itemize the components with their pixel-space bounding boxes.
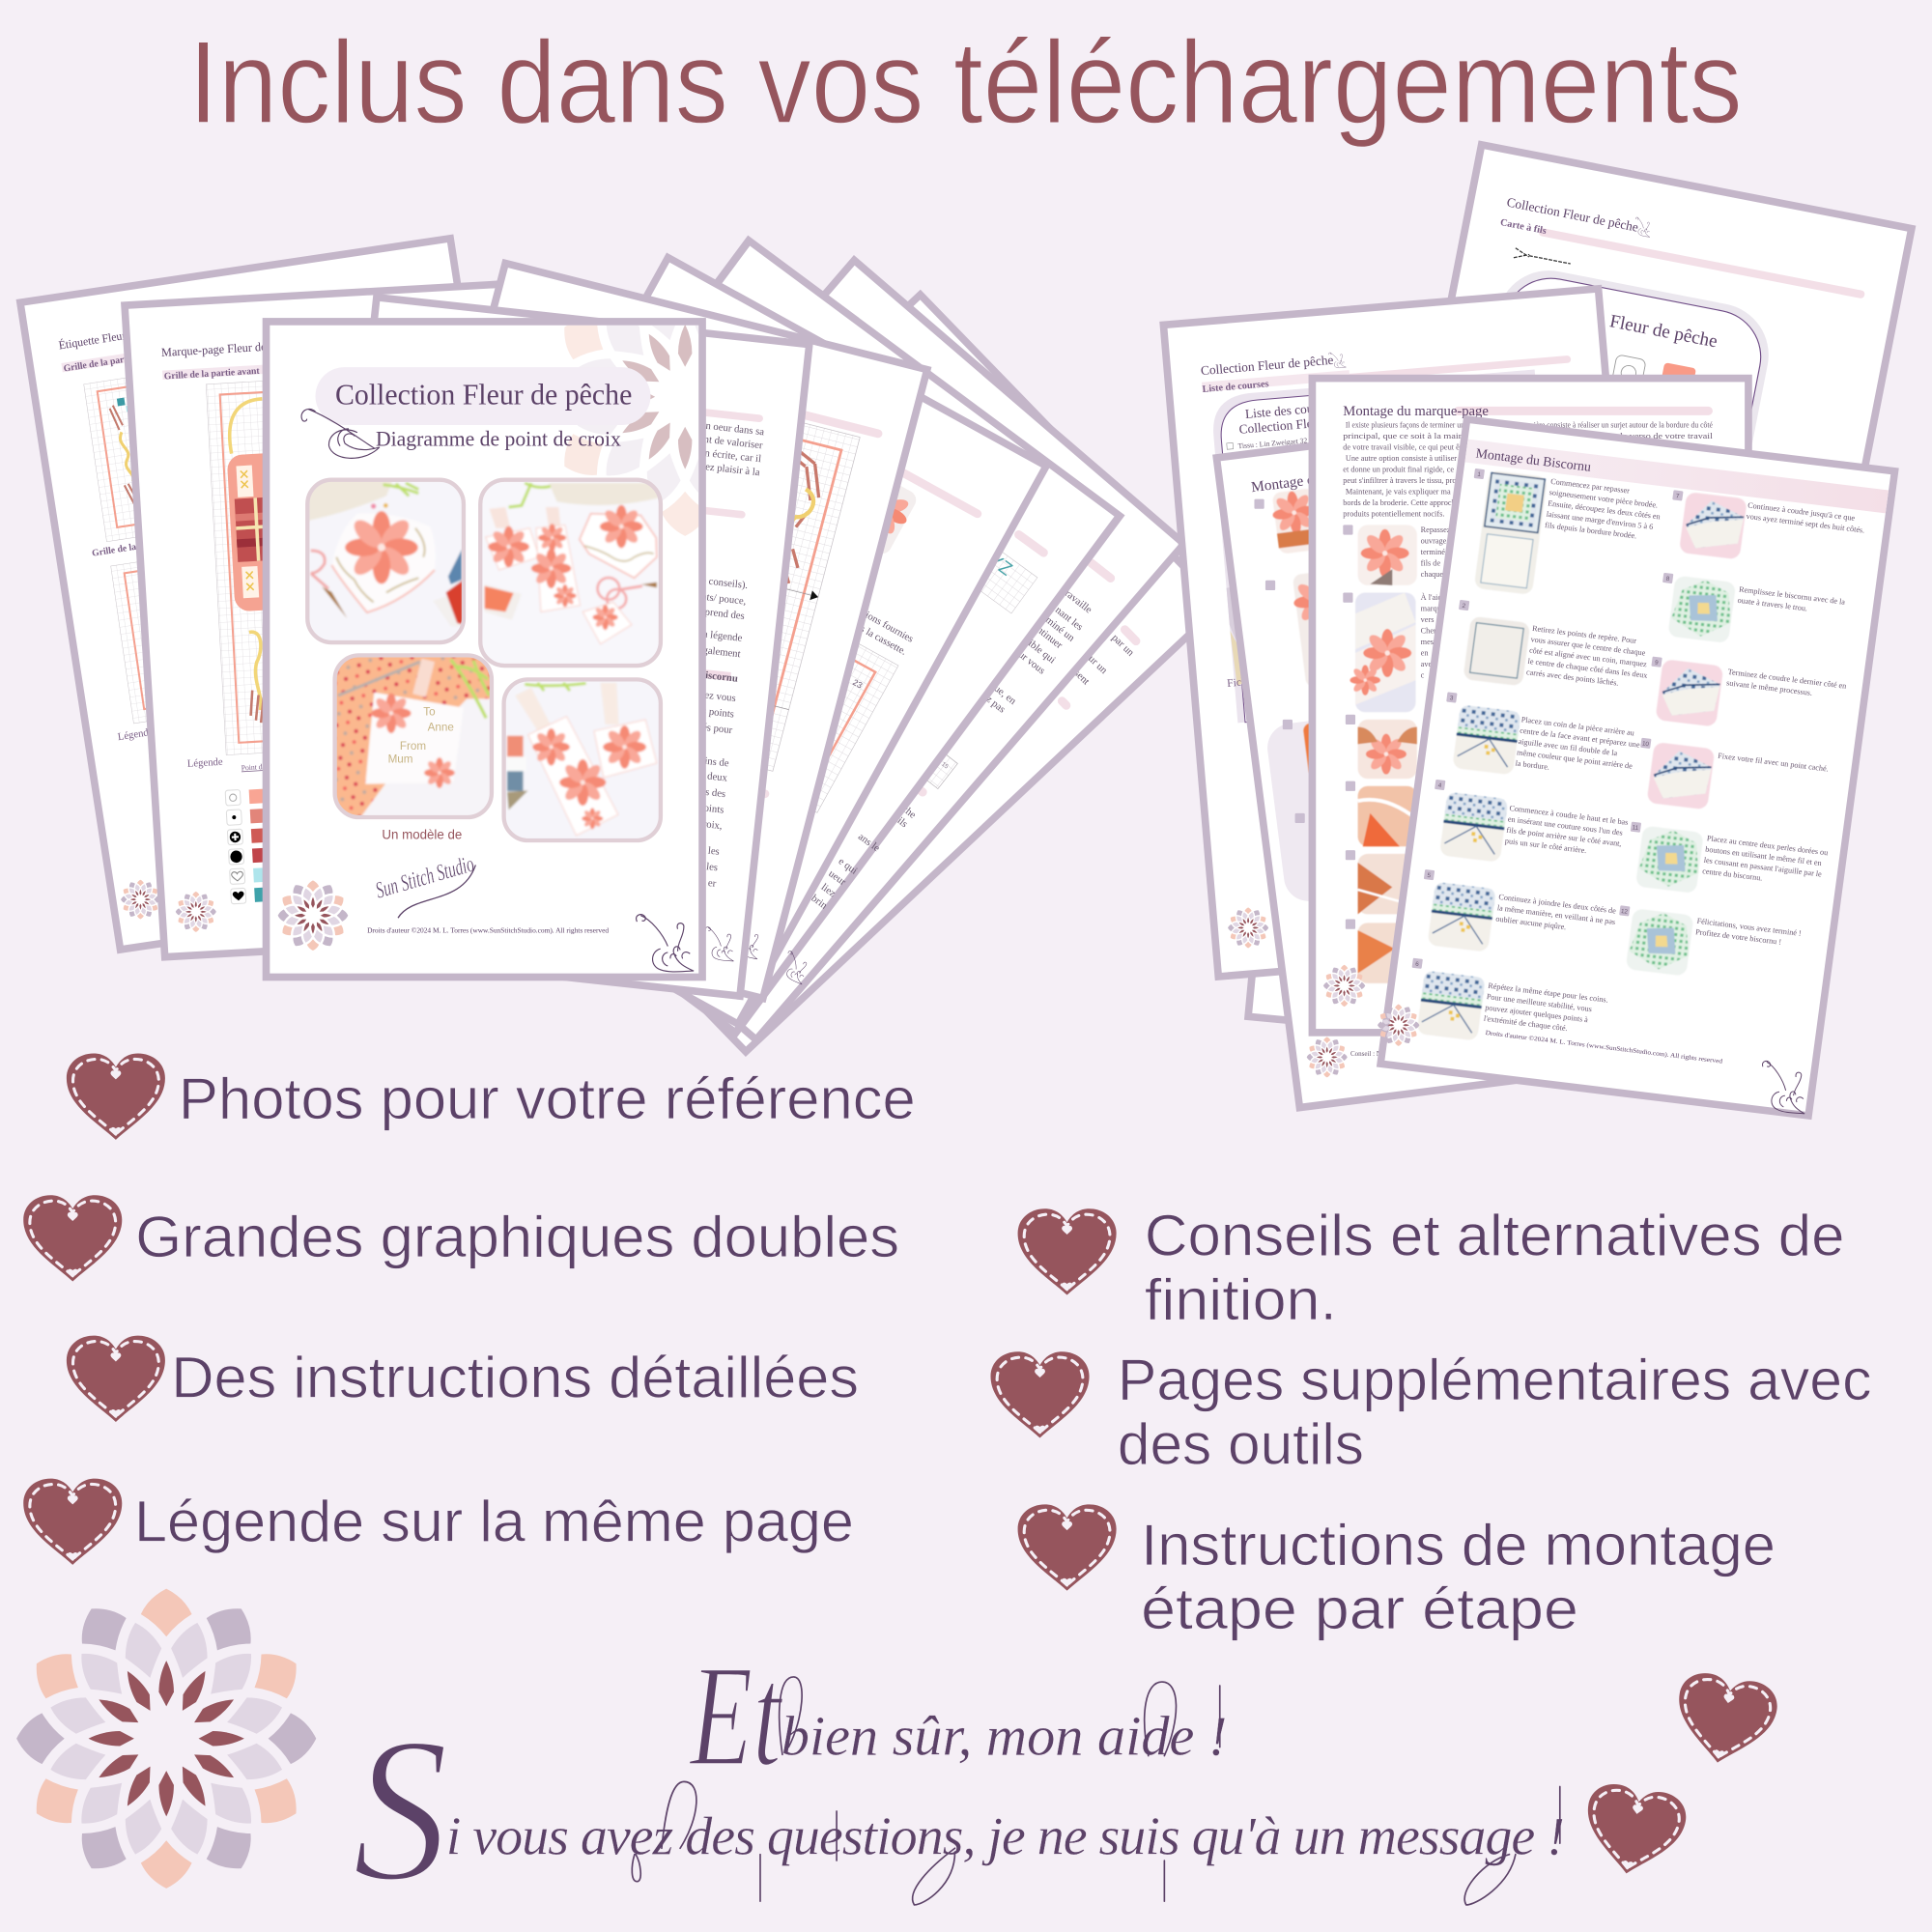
biscornu: photos 3 to 6 [1415, 704, 1521, 1041]
photo: full set [480, 480, 661, 666]
page: liste de courses: Collection Fleur de pêche [1238, 411, 1373, 437]
marque-page: step text: ouvrage [1421, 536, 1447, 545]
marque-page: logo flower [1323, 965, 1365, 1007]
page: fan sheet 8 [445, 295, 1221, 1052]
biscornu: number badges [1408, 466, 1686, 993]
biscornu: number badges: 9 [1655, 659, 1659, 667]
bullet: assembly steps [1141, 1513, 1776, 1641]
page: fan sheet 8: sent [1071, 668, 1092, 688]
biscornu: step text left: puis un sur le côté arrière. [1504, 837, 1587, 855]
script line 2 [353, 1695, 1565, 1924]
cover: swirl ornament [301, 409, 380, 458]
page: instructions sheet 3: les mains de [677, 753, 729, 769]
biscornu: step text left: soigneusement votre pièce brodée. [1548, 488, 1659, 510]
biscornu: step text left: Commencez à coudre le haut et le bas [1509, 804, 1629, 827]
bullet: photos: Photos pour votre référence [179, 1066, 916, 1131]
bullet: finishing advice [1145, 1204, 1844, 1332]
page: marque-page chart: Grille de la partie avant [164, 366, 261, 382]
cover: credit line: Un modèle de [382, 827, 463, 842]
bullet: heart 6 [991, 1351, 1090, 1438]
biscornu: copyright: Droits d'auteur ©2024 M. L. Torres (www.SunStitchStudio.com). All rights reserved [1485, 1030, 1723, 1065]
page: chart sheet 4 [341, 263, 927, 999]
bullet: extra pages: des outils [1118, 1411, 1364, 1476]
biscornu: number badges: 1 [1477, 471, 1482, 478]
montage étiquette: logo flower [1307, 1037, 1348, 1077]
cover: four photos [307, 480, 661, 840]
biscornu: header band: Montage du Biscornu [1475, 446, 1592, 475]
page: carte à fils: Collection Fleur de pêche [1506, 195, 1639, 235]
cover: faded flower watermark [564, 325, 698, 536]
page: montage du marque-page: Il existe plusieurs façons de terminer un marque-page. La première consiste à réaliser un surjet autour de la bordure du côté [1346, 421, 1713, 430]
photo: bookmark and tag [504, 679, 661, 840]
biscornu: step text right: Fixez votre fil avec un point caché. [1718, 752, 1829, 774]
page: instructions sheet 3: s des [705, 786, 726, 800]
large mandala flower [16, 1589, 316, 1889]
page: instructions sheet 3: pour mettre mon oeur dans sa [641, 413, 765, 438]
page: fan sheet 5 [360, 258, 1046, 1024]
marque-page: step text: fils de [1421, 558, 1440, 567]
page: montage du marque-page: peut s'infiltrer à travers le tissu, prov [1343, 476, 1461, 485]
marque-page: step text: Cherchez [1421, 627, 1451, 636]
page: marque-page chart: Marque-page Fleur de pêche [161, 338, 298, 359]
title: Inclus dans vos téléchargements [188, 16, 1743, 148]
page: instructions sheet 3: points [698, 802, 724, 816]
biscornu: step text right: les cousant en passant l'aiguille par le [1703, 856, 1823, 879]
marque-page: step text: terminé [1421, 548, 1445, 556]
biscornu: step text left: Retirez les points de repère. Pour [1532, 624, 1637, 645]
biscornu: step text right [1690, 501, 1873, 951]
page: instructions sheet 3: utilisés pour [681, 719, 733, 736]
page: hidden sheet corner [1248, 361, 1744, 1057]
biscornu: number badges: 3 [1449, 695, 1454, 702]
biscornu: step text left: pouvez ajouter quelques points à [1485, 1003, 1589, 1024]
marque-page: step text: avec [1421, 660, 1435, 668]
biscornu: step text right: Continuez à coudre jusqu'à ce que [1747, 501, 1856, 523]
bullet: heart 5 [1018, 1208, 1117, 1295]
bullet: finishing advice: finition. [1145, 1267, 1337, 1332]
script line 1: Et [689, 1635, 783, 1797]
page: fan sheet 5: dans la cassette. [845, 616, 908, 658]
page: étiquette chart: Grille de la partie avant [63, 349, 159, 375]
page: montage du marque-page: et donne un produit final rigide, ce [1343, 466, 1454, 474]
decorative script flourishes [632, 1677, 1560, 1905]
photo: personalised cushion: Mum [388, 753, 413, 765]
script line 2: S [353, 1695, 448, 1924]
page: instructions sheet 3: des points [692, 704, 735, 721]
page: étiquette chart: Grille de la partie arrière [91, 533, 193, 559]
page: instructions sheet 3: avec la légende [678, 626, 743, 644]
page: fan sheet 6: ueur [826, 867, 848, 888]
script line 1 [689, 1635, 1227, 1797]
biscornu: step text left: la bordure. [1515, 759, 1550, 772]
page: fan sheet 7 [426, 260, 1184, 1039]
page: liste de courses: Fiche [1227, 676, 1252, 690]
page: fan sheet 7: ouche [892, 797, 919, 821]
page: instructions sheet 3: croix, [697, 818, 723, 832]
biscornu: step text left: carrés avec des points lâchés. [1526, 668, 1619, 688]
marque-page: step text: mesure [1421, 638, 1444, 646]
biscornu: step text left: aiguille avec un fil double de la [1518, 737, 1618, 757]
heart: lower right [1577, 1780, 1690, 1882]
biscornu: step text left: la même manière, en veillant à ne pas [1496, 903, 1616, 926]
biscornu: number badges: 4 [1437, 782, 1442, 789]
marque-page: step text: c [1421, 671, 1425, 680]
biscornu: step text right: vous ayez terminé sept des huit côtés. [1746, 512, 1865, 535]
biscornu: step text left: Ensuite, découpez les deux côtés en [1548, 498, 1661, 521]
biscornu: step text left: même couleur que le point arrière de [1517, 748, 1634, 771]
page: montage du marque-page: bords de la broderie. Cette approche [1343, 498, 1460, 507]
marque-page: step text: À l'aide [1421, 592, 1446, 602]
photo: biscornu pincushion [307, 480, 464, 642]
page: fan sheet 7: ntinuer [1035, 624, 1065, 651]
page: étiquette chart [20, 239, 551, 950]
page: liste de courses [1163, 289, 1653, 977]
bullet: finishing advice: Conseils et alternatives de [1145, 1204, 1844, 1268]
biscornu: step text left: laissant une marge d'environ 5 à 6 [1546, 510, 1654, 531]
bullet: assembly steps: étape par étape [1141, 1577, 1578, 1641]
page: montage du marque-page: produits potentiellement nocifs. [1343, 509, 1444, 518]
photo: personalised cushion: Anne [428, 722, 454, 734]
script line 1: bien sûr, mon aide ! [781, 1704, 1227, 1767]
page: fan sheet 6: ans le [856, 831, 882, 854]
page: instructions sheet 3: de 18 points/ pouce, [663, 586, 747, 608]
cover: subtitle: Diagramme de point de croix [376, 428, 621, 451]
page: fan sheet 7: 15 [940, 761, 950, 771]
page: fan sheet 6: YZ [984, 550, 1016, 581]
page: fan sheet 7: que, en [987, 679, 1019, 707]
biscornu: step text left: Pour une meilleure stabilité, vous [1486, 992, 1592, 1013]
photo: personalised cushion [335, 655, 493, 817]
page: fan sheet 7: nant les [1053, 605, 1085, 633]
page: carte à fils [1356, 145, 1912, 870]
page: fan sheet 7: ible qui [1026, 638, 1058, 666]
marque-page: step text: Repassez votre [1421, 526, 1469, 534]
page: marque-page chart: Point de croix [241, 761, 283, 772]
marque-page: step badges [1343, 525, 1355, 929]
biscornu: corner swirl [1756, 1061, 1811, 1115]
page: liste de courses: Liste de courses [1202, 379, 1269, 395]
bullet: legend: Légende sur la même page [134, 1490, 854, 1554]
page: marque-page chart: Légende [186, 756, 223, 770]
biscornu: step text left [1478, 477, 1676, 1037]
marque-page: step photos [1350, 525, 1417, 983]
biscornu: number badges: 2 [1462, 603, 1466, 610]
photo: personalised cushion: To [423, 706, 436, 719]
page: instructions sheet 3: er [707, 877, 717, 890]
biscornu: step text left: Placez un coin de la pièce arrière au [1520, 715, 1634, 737]
cover: title pill [316, 367, 650, 425]
biscornu: step text left: centre de la face avant et préparez une [1520, 726, 1640, 750]
biscornu: step text right: Terminez de coudre le dernier côté en [1727, 668, 1847, 691]
biscornu: step text right: boutons en utilisant le même fil et en [1705, 845, 1822, 867]
biscornu: photos 7 to 12 [1622, 492, 1749, 977]
cover: studio signature [373, 851, 477, 918]
marque-page: step text: marquez [1421, 605, 1448, 613]
page: instructions sheet 3: un moment de valoriser [665, 429, 764, 451]
biscornu: step text right: Félicitations, vous avez terminé ! [1696, 917, 1802, 938]
marque-page: step text [1421, 526, 1469, 680]
bullet: heart 2 [23, 1195, 122, 1282]
page: instructions sheet 3: les [706, 861, 719, 873]
biscornu: number badges: 7 [1675, 493, 1680, 500]
bullet: heart 7 [1018, 1504, 1117, 1591]
script line 2: i vous avez des questions, je ne suis qu'à un message ! [446, 1807, 1565, 1867]
page: montage étiquette [1216, 404, 1731, 1108]
montage étiquette: tip: Conseil : Ne coupez pas [1350, 1050, 1416, 1058]
page: fan sheet 7: ur vous [1016, 648, 1047, 677]
photo: personalised cushion: From [400, 740, 426, 753]
biscornu: number badges: 6 [1415, 961, 1420, 968]
page: liste de courses: Tissu : Lin Zweigart 32 ct [1237, 436, 1316, 450]
biscornu: number badges: 5 [1427, 872, 1432, 879]
page: instructions sheet 3: qui comprend des [671, 603, 745, 622]
page: étiquette chart: Étiquette Fleur de pêche [58, 322, 169, 353]
page: montage du marque-page: de votre travail visible, ce qui peut être [1343, 443, 1468, 452]
cover: copyright: Droits d'auteur ©2024 M. L. Torres (www.SunStitchStudio.com). All rights reserved [367, 927, 610, 935]
biscornu: footer flower [1378, 1005, 1419, 1046]
biscornu: step text right: Placez au centre deux perles dorées ou [1706, 834, 1829, 857]
page: fan sheet 6: brin [810, 893, 830, 912]
bullet: heart 1 [67, 1054, 165, 1140]
bullet: charts: Grandes graphiques doubles [135, 1205, 899, 1269]
page: fan sheet 7: travaille [1061, 585, 1094, 616]
page: instructions sheet 3: également [697, 644, 741, 660]
page: fan sheet 6: e qui [837, 856, 860, 877]
page: instructions sheet 3: vous prendrez plaisir à la [656, 456, 760, 478]
page: fan sheet 8: ur un [1086, 653, 1110, 676]
biscornu: step text right: centre du biscornu. [1702, 867, 1763, 883]
biscornu: step text left: Commencez par repasser [1550, 477, 1631, 496]
page: liste de courses: Collection Fleur de pêche [1200, 353, 1334, 378]
biscornu: number badges: 11 [1632, 824, 1639, 832]
biscornu: step text left: vous assurer que le centre de chaque [1530, 635, 1646, 658]
biscornu: step text left: en insérant une couture sous l'un des [1507, 814, 1623, 838]
page: montage du marque-page: Maintenant, je vais expliquer ma [1346, 487, 1451, 496]
page: fan sheet 6: liez [819, 881, 838, 899]
bullet: heart 4 [23, 1479, 122, 1565]
heart: upper right [1669, 1669, 1781, 1771]
cover: title pill: Collection Fleur de pêche [335, 378, 632, 411]
page: fan sheet 6 [365, 241, 1120, 1033]
marque-page: step text: chaque [1421, 570, 1443, 579]
bullet: extra pages: Pages supplémentaires avec [1118, 1348, 1872, 1412]
biscornu: step text right: Remplissez le biscornu avec de la [1739, 585, 1846, 607]
biscornu: photo 2 [1463, 616, 1530, 686]
biscornu: step text left: Répétez la même étape pour les coins. [1488, 981, 1608, 1005]
montage étiquette: step badges [1254, 499, 1305, 823]
page: instructions sheet 3: d'expression écrite, car il [659, 442, 762, 465]
page: étiquette chart: Légende [117, 726, 154, 743]
cover: corner swirl [637, 915, 694, 972]
biscornu: number badges: 8 [1665, 576, 1670, 582]
cover: logo flower [278, 880, 348, 951]
page: instructions sheet 3: les [707, 845, 720, 858]
biscornu: step text right: ouate à travers le trou. [1737, 596, 1808, 613]
marque-page: step text: en [1421, 649, 1429, 658]
biscornu: step text right: suivant le même processus. [1726, 678, 1813, 697]
biscornu: step text left: côté est aligné avec un coin, marquez [1529, 646, 1648, 668]
page: fan sheet 7: ez pas [980, 691, 1008, 716]
marque-page: step text: vers [1421, 615, 1434, 624]
page: instructions sheet 3: de conseils). [696, 574, 749, 591]
page: fan sheet 7: miné un [1043, 614, 1077, 644]
biscornu: step text left: oublier aucune piqûre. [1495, 915, 1567, 931]
page: fan sheet 7: 25 [920, 767, 929, 777]
page: montage étiquette: Montage de l'étiquette [1250, 463, 1382, 496]
biscornu: number badges: 12 [1620, 908, 1629, 916]
page: marque-page chart [125, 281, 599, 957]
biscornu: number badges: 10 [1641, 740, 1650, 748]
bullet: assembly steps: Instructions de montage [1141, 1513, 1776, 1577]
page: carte à fils: Collection Fleur de pêche [1527, 296, 1719, 352]
page: fan sheet 5: 23 [851, 677, 865, 690]
page: liste de courses: Liste des courses [1244, 399, 1334, 421]
page: instructions sheet 3 [307, 298, 810, 996]
page: montage du marque-page: principal, que ce soit à la main ou à l'aide d'une machine, ce qui laisse le verso de votre travail [1343, 432, 1714, 440]
page: fan sheet 8: par un [1109, 632, 1137, 659]
page: carte à fils: Carte à fils [1499, 217, 1548, 237]
page: instructions sheet 3: Si vous avez vous [662, 685, 736, 704]
page: montage du marque-page [1312, 379, 1748, 1033]
biscornu: step text left: le centre de chaque côté dans les deux [1527, 657, 1648, 680]
bullet: instructions: Des instructions détaillées [171, 1345, 859, 1409]
page: montage du biscornu [1380, 419, 1895, 1116]
biscornu: step text left: fils de point arrière sur le côté avant, [1506, 826, 1622, 848]
biscornu: step text left: Continuez à joindre les deux côtés de [1498, 893, 1617, 916]
page: instructions sheet 3: deux [707, 770, 728, 784]
biscornu: step text right: Profitez de votre biscornu ! [1695, 927, 1782, 947]
page: montage du marque-page: Montage du marque-page [1343, 404, 1489, 419]
bullet: extra pages [1118, 1348, 1872, 1476]
page: montage du marque-page: Une autre option consiste à utiliser [1346, 454, 1457, 463]
biscornu: photo 1 [1474, 470, 1548, 595]
bullet: heart 3 [67, 1336, 165, 1422]
page: fan sheet 7: nseils [884, 807, 910, 830]
biscornu: step text left: fils depuis la bordure brodée. [1545, 521, 1637, 540]
biscornu: step text left: l'extrémité de chaque côté. [1483, 1014, 1568, 1033]
biscornu: header band [1464, 440, 1889, 513]
page: fan sheet 5: les instructions fournies [824, 588, 915, 645]
cover: studio signature: Sun Stitch Studio [373, 851, 477, 904]
page: instructions sheet 3: Biscornu [697, 668, 738, 685]
page: cover [263, 318, 706, 981]
